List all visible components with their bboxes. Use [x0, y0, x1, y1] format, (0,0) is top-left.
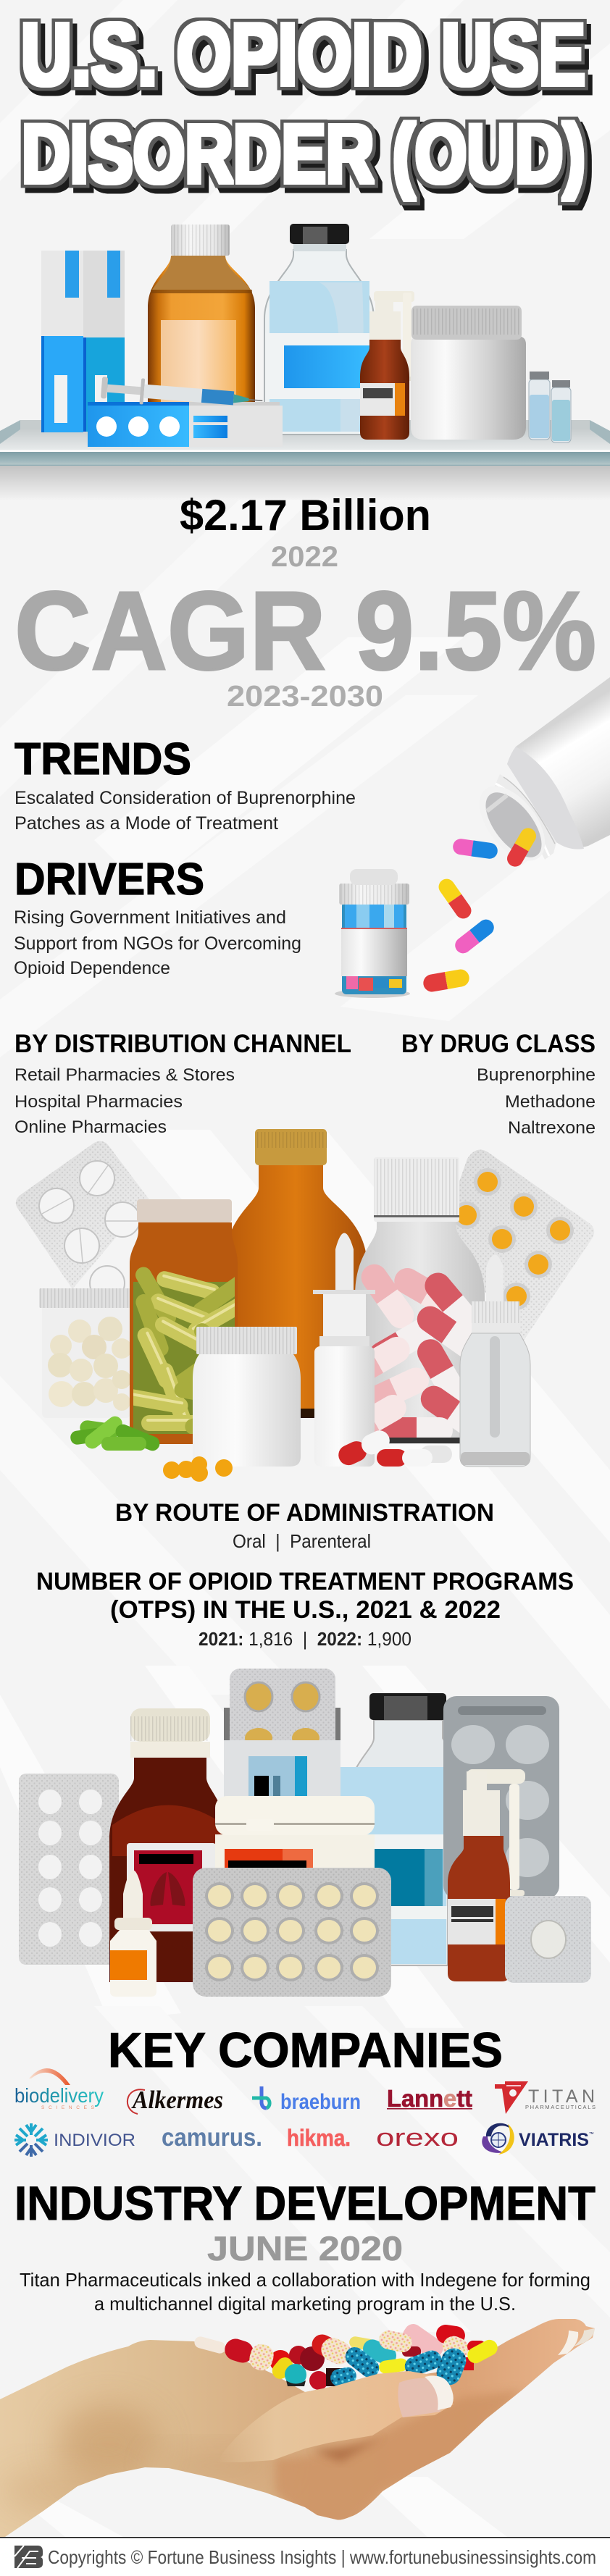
shelf [0, 420, 610, 500]
logo: Braeburn [252, 2086, 361, 2114]
brown spray bottle [448, 1769, 525, 1981]
nasal spray bottle [313, 1233, 375, 1467]
white pill bottle [193, 1327, 301, 1467]
drug class segment: Naltrexone [508, 1118, 596, 1138]
vials [529, 372, 571, 442]
left white blister [19, 1774, 119, 1965]
white tablet blister [16, 1141, 149, 1301]
capsule: blue and pink [452, 916, 497, 957]
opioid treatment programs statistic: (OTPS) IN THE U.S., 2021 & 2022 [110, 1596, 501, 1624]
market size 2022: $2.17 Billion [180, 491, 431, 540]
title [21, 5, 585, 201]
footer [0, 2537, 610, 2576]
single pill blister [505, 1896, 591, 1983]
tall amber bottle [224, 1129, 367, 1418]
logo: Titan Pharmaceuticals: PHARMACEUTICALS [525, 2104, 596, 2110]
opioid treatment programs statistic: 2021: 1,816 | 2022: 1,900 [199, 1628, 411, 1650]
loose green capsules [70, 1414, 162, 1453]
logo: Viatris: VIATRIS [519, 2130, 589, 2150]
development description: Titan Pharmaceuticals inked a collaboration with Indegene for forming [20, 2269, 590, 2291]
icon: Fortune Business Insights logo [14, 2546, 43, 2568]
hand [0, 2319, 595, 2537]
opioid treatment programs statistic [36, 1568, 574, 1650]
drug class segment: BY DRUG CLASS [401, 1030, 596, 1058]
amber jar with green capsules [130, 1199, 235, 1444]
pill jar [335, 869, 410, 998]
drivers text block: Opioid Dependence [14, 958, 170, 978]
route of administration segment: BY ROUTE OF ADMINISTRATION [115, 1499, 494, 1527]
glass bottle with teal label [338, 1693, 448, 1965]
logo: Indivior: INDIVIOR [54, 2131, 135, 2150]
illustration: medicines on shelf [0, 224, 610, 500]
logo: BioDelivery Sciences: biodelivery [14, 2084, 104, 2107]
blue pack [88, 402, 283, 447]
logo: Alkermes: Alkermes [131, 2086, 223, 2114]
illustration: hand holding pills [0, 2319, 595, 2537]
CAGR figure: 2023-2030 [227, 679, 383, 713]
distribution channel segment: Hospital Pharmacies [14, 1092, 183, 1112]
illustration: open bottle and pills [335, 677, 610, 998]
development description: a multichannel digital marketing program in the U.S. [94, 2293, 516, 2315]
loose red capsules [335, 1427, 452, 1469]
trends text block [14, 734, 356, 834]
company logos [14, 2068, 596, 2157]
development description [20, 2269, 590, 2315]
drivers text block: Rising Government Initiatives and [14, 907, 286, 928]
capsule: yellow and red [435, 876, 475, 922]
logo: Titan Pharmaceuticals: TITAN [528, 2086, 595, 2107]
logo: Viatris: ™ [589, 2132, 594, 2137]
market size 2022 [180, 491, 431, 573]
drivers text block: Support from NGOs for Overcoming [14, 934, 301, 954]
development date: JUNE 2020 [207, 2229, 403, 2267]
logo: BioDelivery Sciences: SCIENCES [41, 2105, 95, 2110]
distribution channel segment: Online Pharmacies [14, 1117, 167, 1137]
handful of capsules [193, 2320, 501, 2390]
logo: Orexo: orexo [376, 2124, 459, 2152]
drug class segment [401, 1030, 596, 1138]
logo: Lannett: Lannett [387, 2085, 472, 2112]
large blister pack [193, 1868, 391, 1997]
logo: Indivior [14, 2123, 135, 2157]
carton with gold blister [224, 1669, 340, 1805]
glass bottle [264, 224, 374, 435]
key companies heading: KEY COMPANIES [108, 2023, 503, 2078]
syringe [101, 375, 264, 414]
spray bottle [360, 291, 414, 440]
thumb [217, 2371, 454, 2462]
drug class segment: Buprenorphine [477, 1065, 596, 1085]
route of administration segment: Oral | Parenteral [233, 1530, 371, 1552]
distribution channel segment: Retail Pharmacies & Stores [14, 1065, 235, 1085]
logo: Hikma: hikma. [287, 2125, 351, 2151]
opioid treatment programs statistic: NUMBER OF OPIOID TREATMENT PROGRAMS [36, 1568, 574, 1595]
orange tablet blister [442, 1150, 594, 1343]
trends text block: Patches as a Mode of Treatment [14, 813, 278, 834]
white jar with orange label [215, 1796, 375, 1871]
illustration: medicine group [19, 1669, 591, 1997]
logo: BioDelivery Sciences [14, 2068, 104, 2110]
jar of pale softgels [39, 1288, 132, 1418]
amber bottle [148, 225, 255, 409]
distribution channel segment: BY DISTRIBUTION CHANNEL [14, 1030, 351, 1058]
logo: Titan Pharmaceuticals [495, 2081, 596, 2114]
drug class segment: Methadone [505, 1092, 596, 1112]
route of administration segment [115, 1499, 494, 1552]
drivers text block [14, 855, 301, 978]
blue cartons [41, 251, 125, 432]
drivers text block: DRIVERS [14, 855, 204, 905]
logo: Braeburn: braeburn [280, 2090, 361, 2114]
logo: Camurus: camurus. [162, 2123, 262, 2152]
illustration: bottles and blisters [16, 1129, 594, 1482]
white ampoule [110, 1870, 156, 1997]
trends text block: TRENDS [14, 734, 191, 784]
CAGR figure: CAGR 9.5% [14, 569, 596, 693]
clear dropper bottle [460, 1254, 530, 1467]
capsule: pink and blue [452, 838, 498, 860]
capsule: red and yellow at bottle mouth [504, 825, 539, 870]
logo: Viatris [482, 2123, 594, 2155]
dark brown syrup bottle [109, 1708, 227, 1982]
tipped white bottle [467, 677, 610, 873]
loose orange softgels [163, 1456, 233, 1482]
market size 2022: 2022 [271, 541, 338, 573]
trends text block: Escalated Consideration of Buprenorphine [14, 788, 356, 808]
white jar [411, 306, 526, 440]
capsule: red and yellow lying [422, 968, 471, 993]
distribution channel segment [14, 1030, 351, 1137]
glass bottle with red capsules [355, 1159, 485, 1444]
grey blister [443, 1696, 559, 1899]
